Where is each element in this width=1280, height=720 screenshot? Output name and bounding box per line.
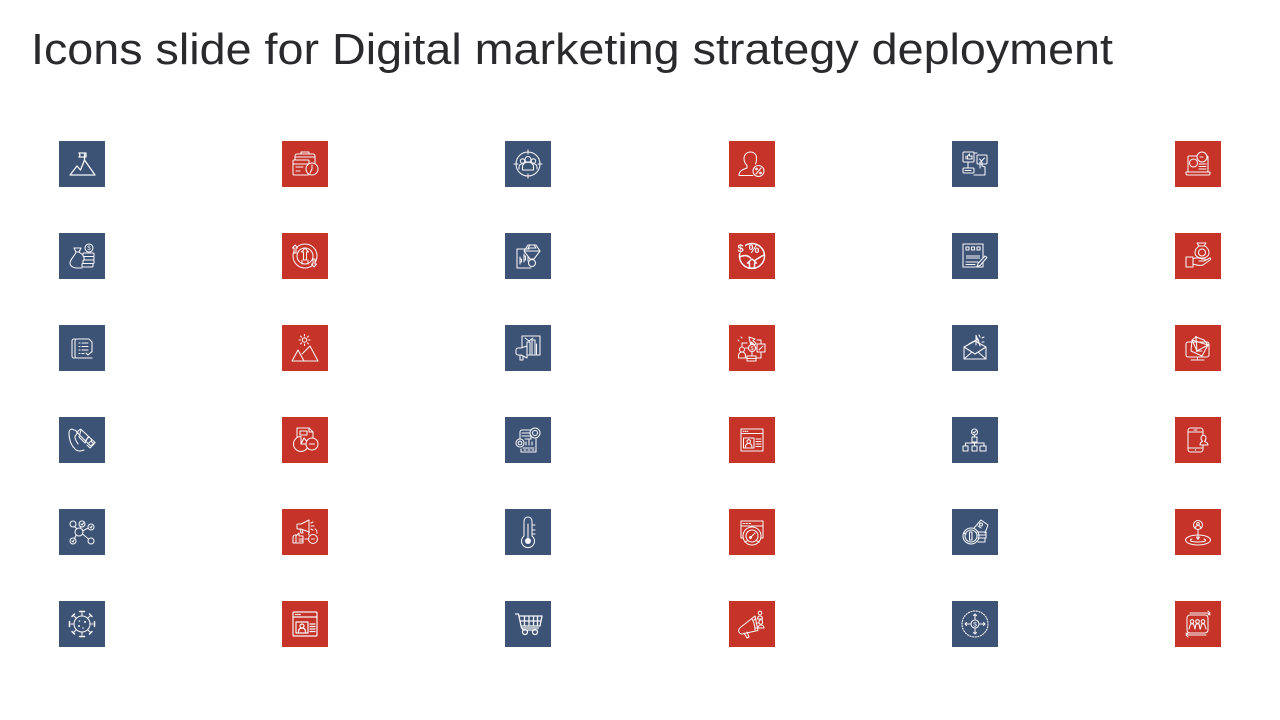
icon: gears and document [505, 417, 551, 463]
icon: browser with profile card large [282, 601, 328, 647]
icon: circular arrows with person [282, 233, 328, 279]
icon: envelope with megaphone [952, 325, 998, 371]
icon: megaphone with thumbs up and chat [282, 509, 328, 555]
icon: virus [59, 601, 105, 647]
icon: social feedback panels [952, 141, 998, 187]
icon: documents with checklist [59, 325, 105, 371]
icon: calendar briefcase with clock [282, 141, 328, 187]
icon: money bag and coins: $ [87, 246, 91, 252]
icon: laptop with user and chat [1175, 141, 1221, 187]
icon: team in rounded frame [1175, 601, 1221, 647]
icon: coin and dollar bill [952, 509, 998, 555]
icon: mountains and sun [282, 325, 328, 371]
icon: monitor with network [1175, 325, 1221, 371]
icon: mountain with flag [59, 141, 105, 187]
icon: money bag and coins [59, 233, 105, 279]
icon: org chart [952, 417, 998, 463]
icon: dollar circle with dashed ring and arrows [952, 601, 998, 647]
icon: shopping cart [505, 601, 551, 647]
icon: circle with percent and dollar [729, 233, 775, 279]
icon: person with percent badge [729, 141, 775, 187]
icon: hand holding money bag [1175, 233, 1221, 279]
icon: megaphone and bar chart [505, 325, 551, 371]
icon: hub with connected nodes [59, 509, 105, 555]
icon: user location target [1175, 509, 1221, 555]
title: Icons slide for Digital marketing strategy deployment [31, 25, 1113, 74]
icon: circle with percent and dollar: % [749, 242, 760, 256]
icon: dollar circle with dashed ring and arrows: $ [973, 621, 977, 628]
icon: document with pie chart and clock [282, 417, 328, 463]
icon: phone with user [1175, 417, 1221, 463]
icon: hand holding phone [59, 417, 105, 463]
icon: circle with percent and dollar: $ [737, 243, 744, 255]
icon: megaphone with people [729, 601, 775, 647]
icon: browser with speedometer [729, 509, 775, 555]
icon: gem funnel over chart [505, 233, 551, 279]
icon: target with people [505, 141, 551, 187]
icon: dollar network with user and cursor [729, 325, 775, 371]
icon: thermometer [505, 509, 551, 555]
icon: browser with profile card [729, 417, 775, 463]
icon: dollar network with user and cursor: $ [750, 346, 754, 352]
icon: document with pencil [952, 233, 998, 279]
